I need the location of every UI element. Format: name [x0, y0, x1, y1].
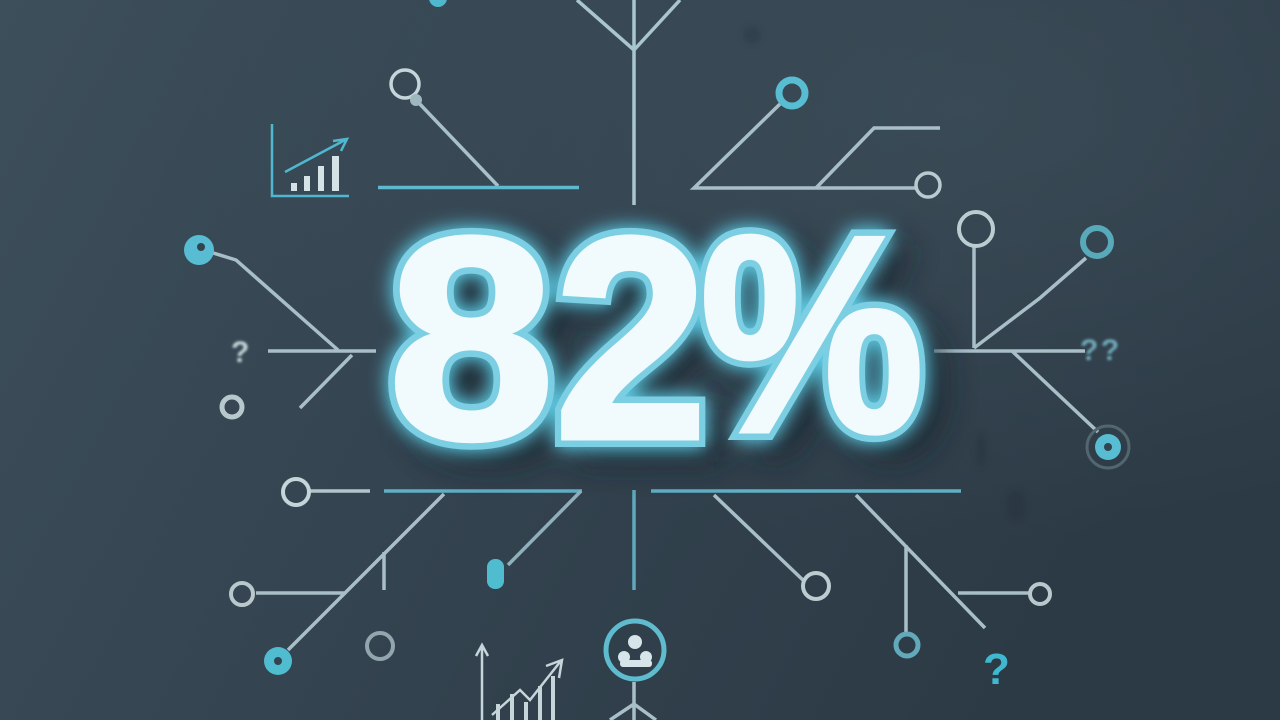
question mark bottom right: ? — [983, 645, 1010, 694]
headline: dark shadow — [406, 191, 942, 514]
right branch — [934, 212, 1129, 468]
bottom-right branches — [651, 491, 1050, 656]
headline: cyan outline — [388, 177, 924, 500]
headline: dark shadow: % — [718, 194, 942, 506]
upper-right branch — [694, 80, 940, 197]
cyan node bottom-left — [487, 559, 504, 589]
headline: cyan outline: % — [700, 179, 924, 491]
right question marks: ? ? — [1080, 334, 1119, 367]
headline: glow: 2 — [554, 177, 708, 499]
smudge near top — [743, 26, 761, 44]
headline: cyan outline: 2 — [554, 177, 708, 499]
icon: people group — [618, 635, 652, 667]
left branch — [184, 235, 376, 417]
headline: 82%: % — [700, 179, 924, 491]
top branch lines — [577, 0, 680, 205]
centre bottom line — [606, 490, 664, 720]
upper-left branch — [378, 70, 579, 188]
bottom-left branches — [231, 479, 582, 675]
headline: cyan outline: 8 — [388, 178, 555, 500]
question mark left: ? — [231, 336, 249, 369]
icon: bottom line chart — [476, 645, 562, 720]
smudges lower right — [976, 432, 1026, 520]
headline: 82% — [388, 177, 924, 500]
headline: glow — [388, 177, 924, 500]
headline: glow: % — [700, 179, 924, 491]
headline: dark shadow: 8 — [406, 192, 573, 514]
icon: top cyan node — [429, 0, 447, 7]
headline: 82%: 8 — [388, 178, 555, 500]
headline: dark shadow: 2 — [572, 191, 726, 513]
headline: glow: 8 — [388, 178, 555, 500]
icon: rising bar chart left — [272, 124, 349, 196]
headline: 82%: 2 — [554, 177, 708, 499]
